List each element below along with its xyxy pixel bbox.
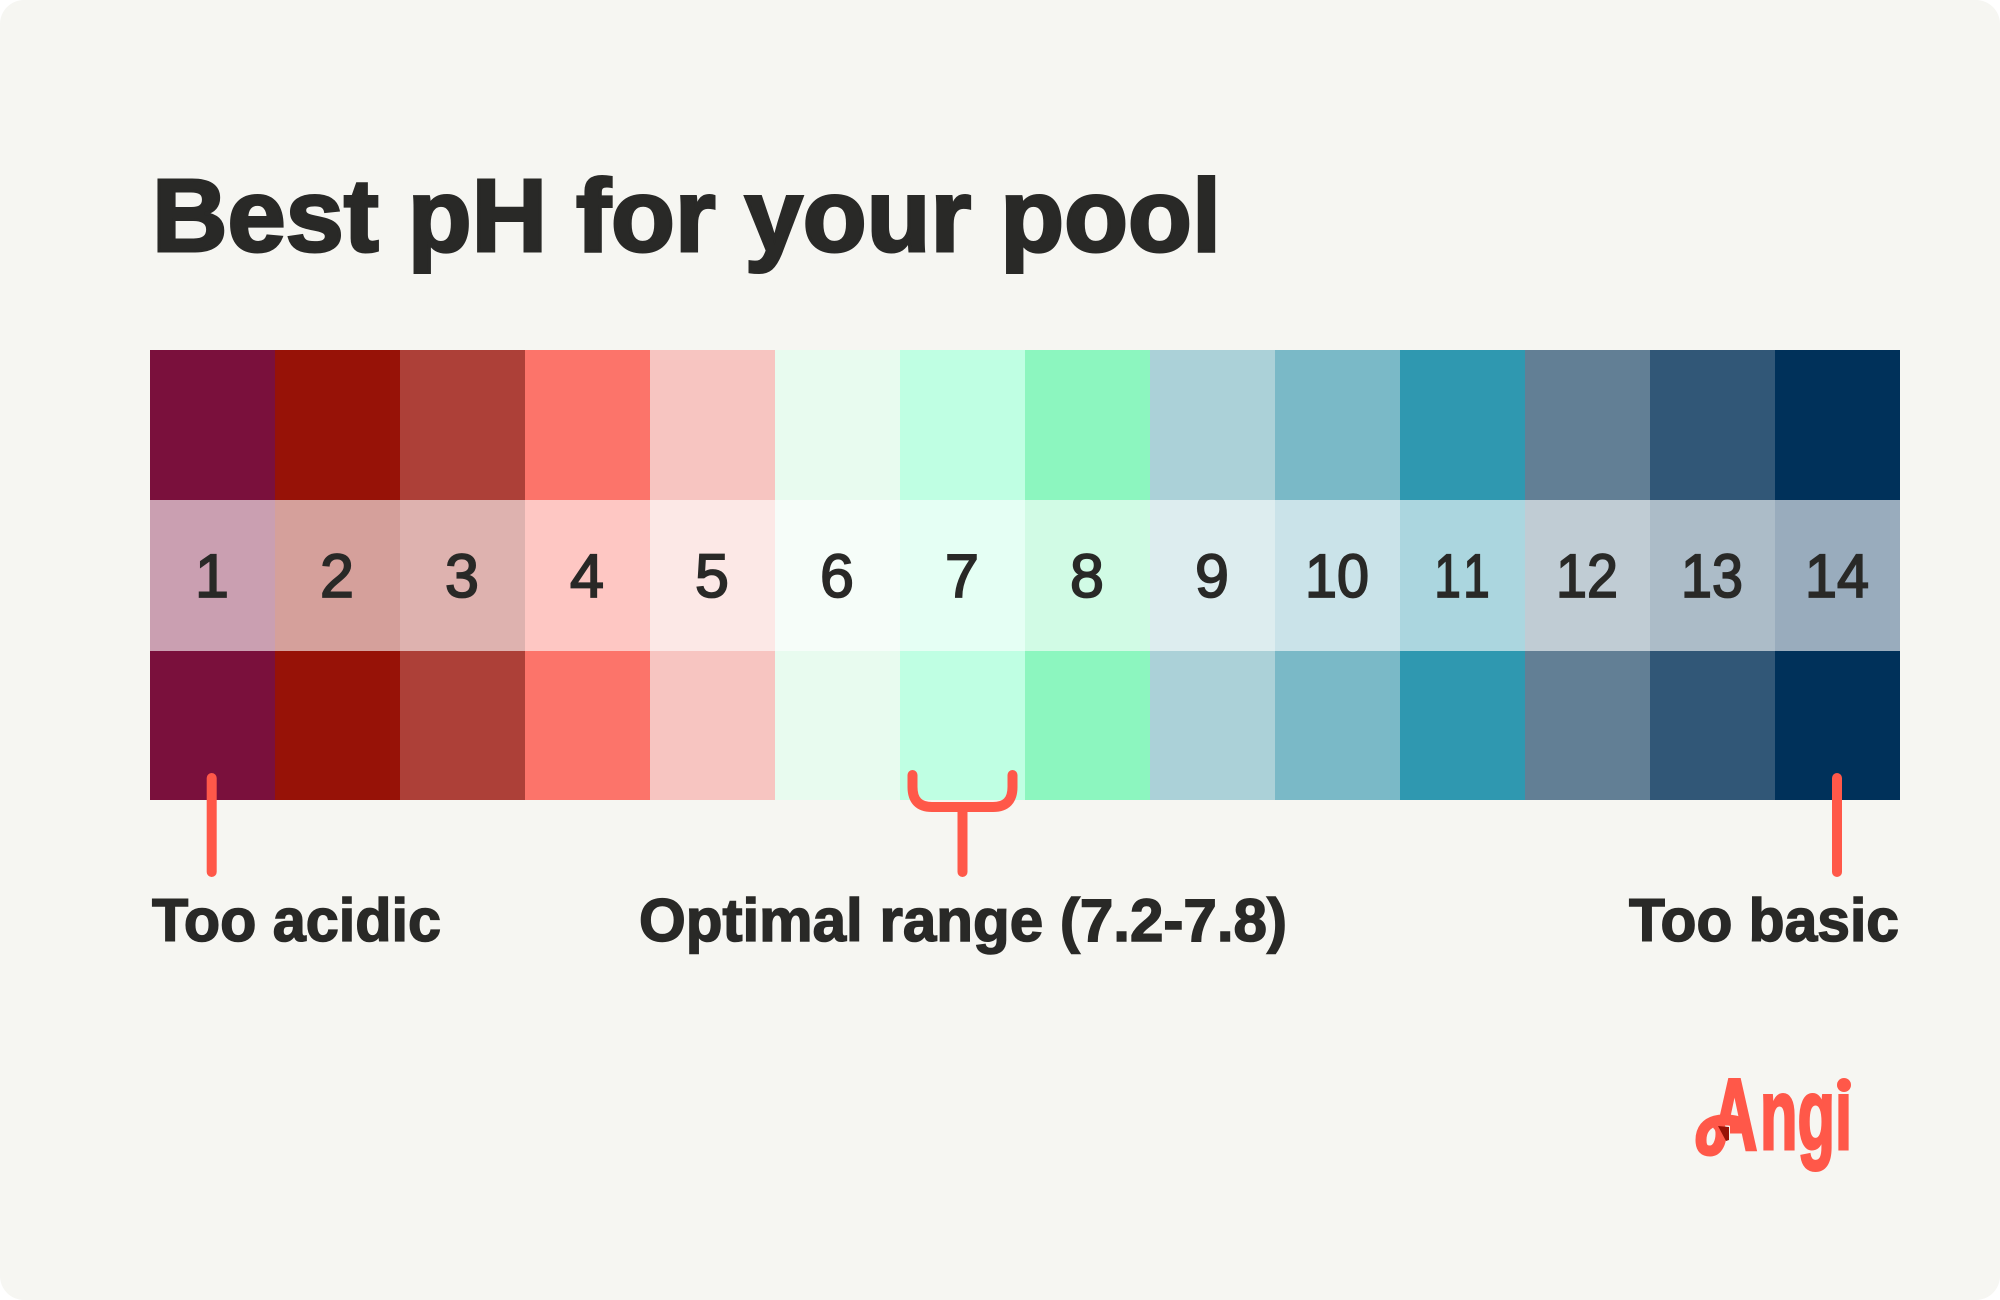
logo: Angi xyxy=(1696,1078,1851,1172)
pH numbers: 13 xyxy=(1681,542,1743,610)
pH numbers: 3 xyxy=(445,542,479,610)
pH numbers xyxy=(195,541,1869,610)
pH numbers: 4 xyxy=(570,542,604,610)
title: Best pH for your pool xyxy=(152,158,1221,273)
label: optimal range: Optimal range (7.2-7.8) xyxy=(639,887,1287,954)
marker: too basic xyxy=(1832,778,1842,872)
label: too acidic: Too acidic xyxy=(152,887,441,954)
pH scale chart xyxy=(150,350,1900,800)
pH numbers: 11 xyxy=(1434,541,1490,610)
pH numbers: 7 xyxy=(945,542,979,610)
bracket: optimal range xyxy=(912,775,1012,872)
pH numbers: 12 xyxy=(1556,542,1618,610)
pH numbers: 14 xyxy=(1805,542,1869,610)
label: too basic: Too basic xyxy=(1629,887,1899,954)
translucent number band xyxy=(150,500,1900,651)
pH numbers: 1 xyxy=(195,542,229,610)
marker: too acidic xyxy=(207,778,217,872)
logo: Angi: ngi xyxy=(1760,1059,1852,1171)
pH numbers: 2 xyxy=(320,542,354,610)
pH numbers: 8 xyxy=(1070,542,1104,610)
pH numbers: 5 xyxy=(695,542,729,610)
logo: Angi: A xyxy=(1712,1059,1757,1171)
pH numbers: 9 xyxy=(1195,542,1229,610)
pH numbers: 6 xyxy=(820,542,854,610)
pH numbers: 10 xyxy=(1305,542,1369,610)
color columns xyxy=(150,350,1900,800)
